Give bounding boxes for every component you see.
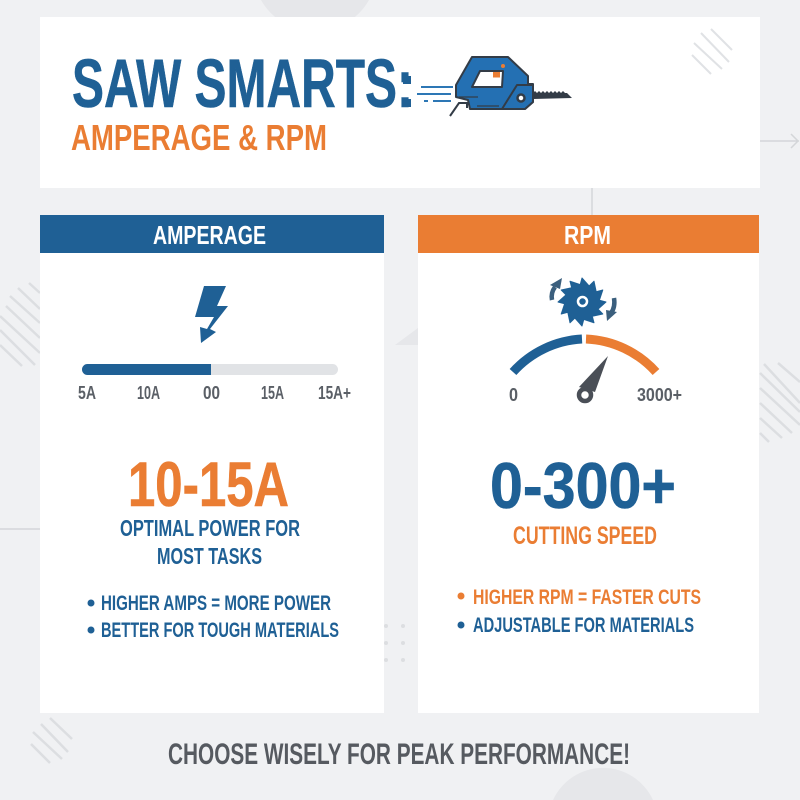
heading: rpm: RPM (564, 220, 611, 250)
heading: amperage (40, 215, 384, 253)
bar: amperage scale (82, 364, 338, 375)
stat: 10-15A: 10-15A (128, 450, 289, 520)
caption: optimal power: MOST TASKS (157, 543, 262, 569)
panel: rpm (418, 215, 759, 713)
gauge labels: 3000+ (637, 385, 682, 405)
bullet list: amperage (88, 592, 339, 642)
heading: amperage: AMPERAGE (153, 220, 266, 250)
icon: lightning bolt (195, 286, 228, 343)
scale labels: 5A (78, 383, 96, 403)
icon: jigsaw (403, 57, 572, 116)
heading: rpm (418, 215, 759, 253)
scale labels: 00 (203, 383, 220, 403)
panel: amperage (40, 215, 384, 713)
bullet list: rpm: ADJUSTABLE FOR MATERIALS (473, 614, 694, 637)
caption: optimal power (120, 515, 300, 569)
stat: 0-300+: 0-300+ (490, 449, 676, 522)
panel: title banner (40, 17, 760, 188)
bullet list: amperage: HIGHER AMPS = MORE POWER (101, 592, 331, 615)
title: saw smarts: SAW SMARTS: (72, 45, 413, 122)
scale labels: 15A (261, 383, 284, 403)
scale labels: 10A (137, 383, 160, 403)
icon: saw blade with rotation arrows (550, 278, 617, 326)
bullet list: amperage: BETTER FOR TOUGH MATERIALS (101, 619, 339, 642)
subtitle: amperage and rpm: AMPERAGE & RPM (71, 117, 327, 158)
gauge labels: 0 (509, 385, 518, 405)
caption: optimal power: OPTIMAL POWER FOR (120, 515, 300, 541)
bullet list: rpm (458, 586, 701, 637)
gauge needle (579, 356, 608, 401)
caption: cutting speed: CUTTING SPEED (513, 522, 657, 550)
gauge (513, 339, 656, 401)
scale labels (78, 383, 351, 403)
gauge labels (509, 385, 682, 405)
scale labels: 15A+ (318, 383, 351, 403)
bullet list: rpm: HIGHER RPM = FASTER CUTS (473, 586, 701, 609)
